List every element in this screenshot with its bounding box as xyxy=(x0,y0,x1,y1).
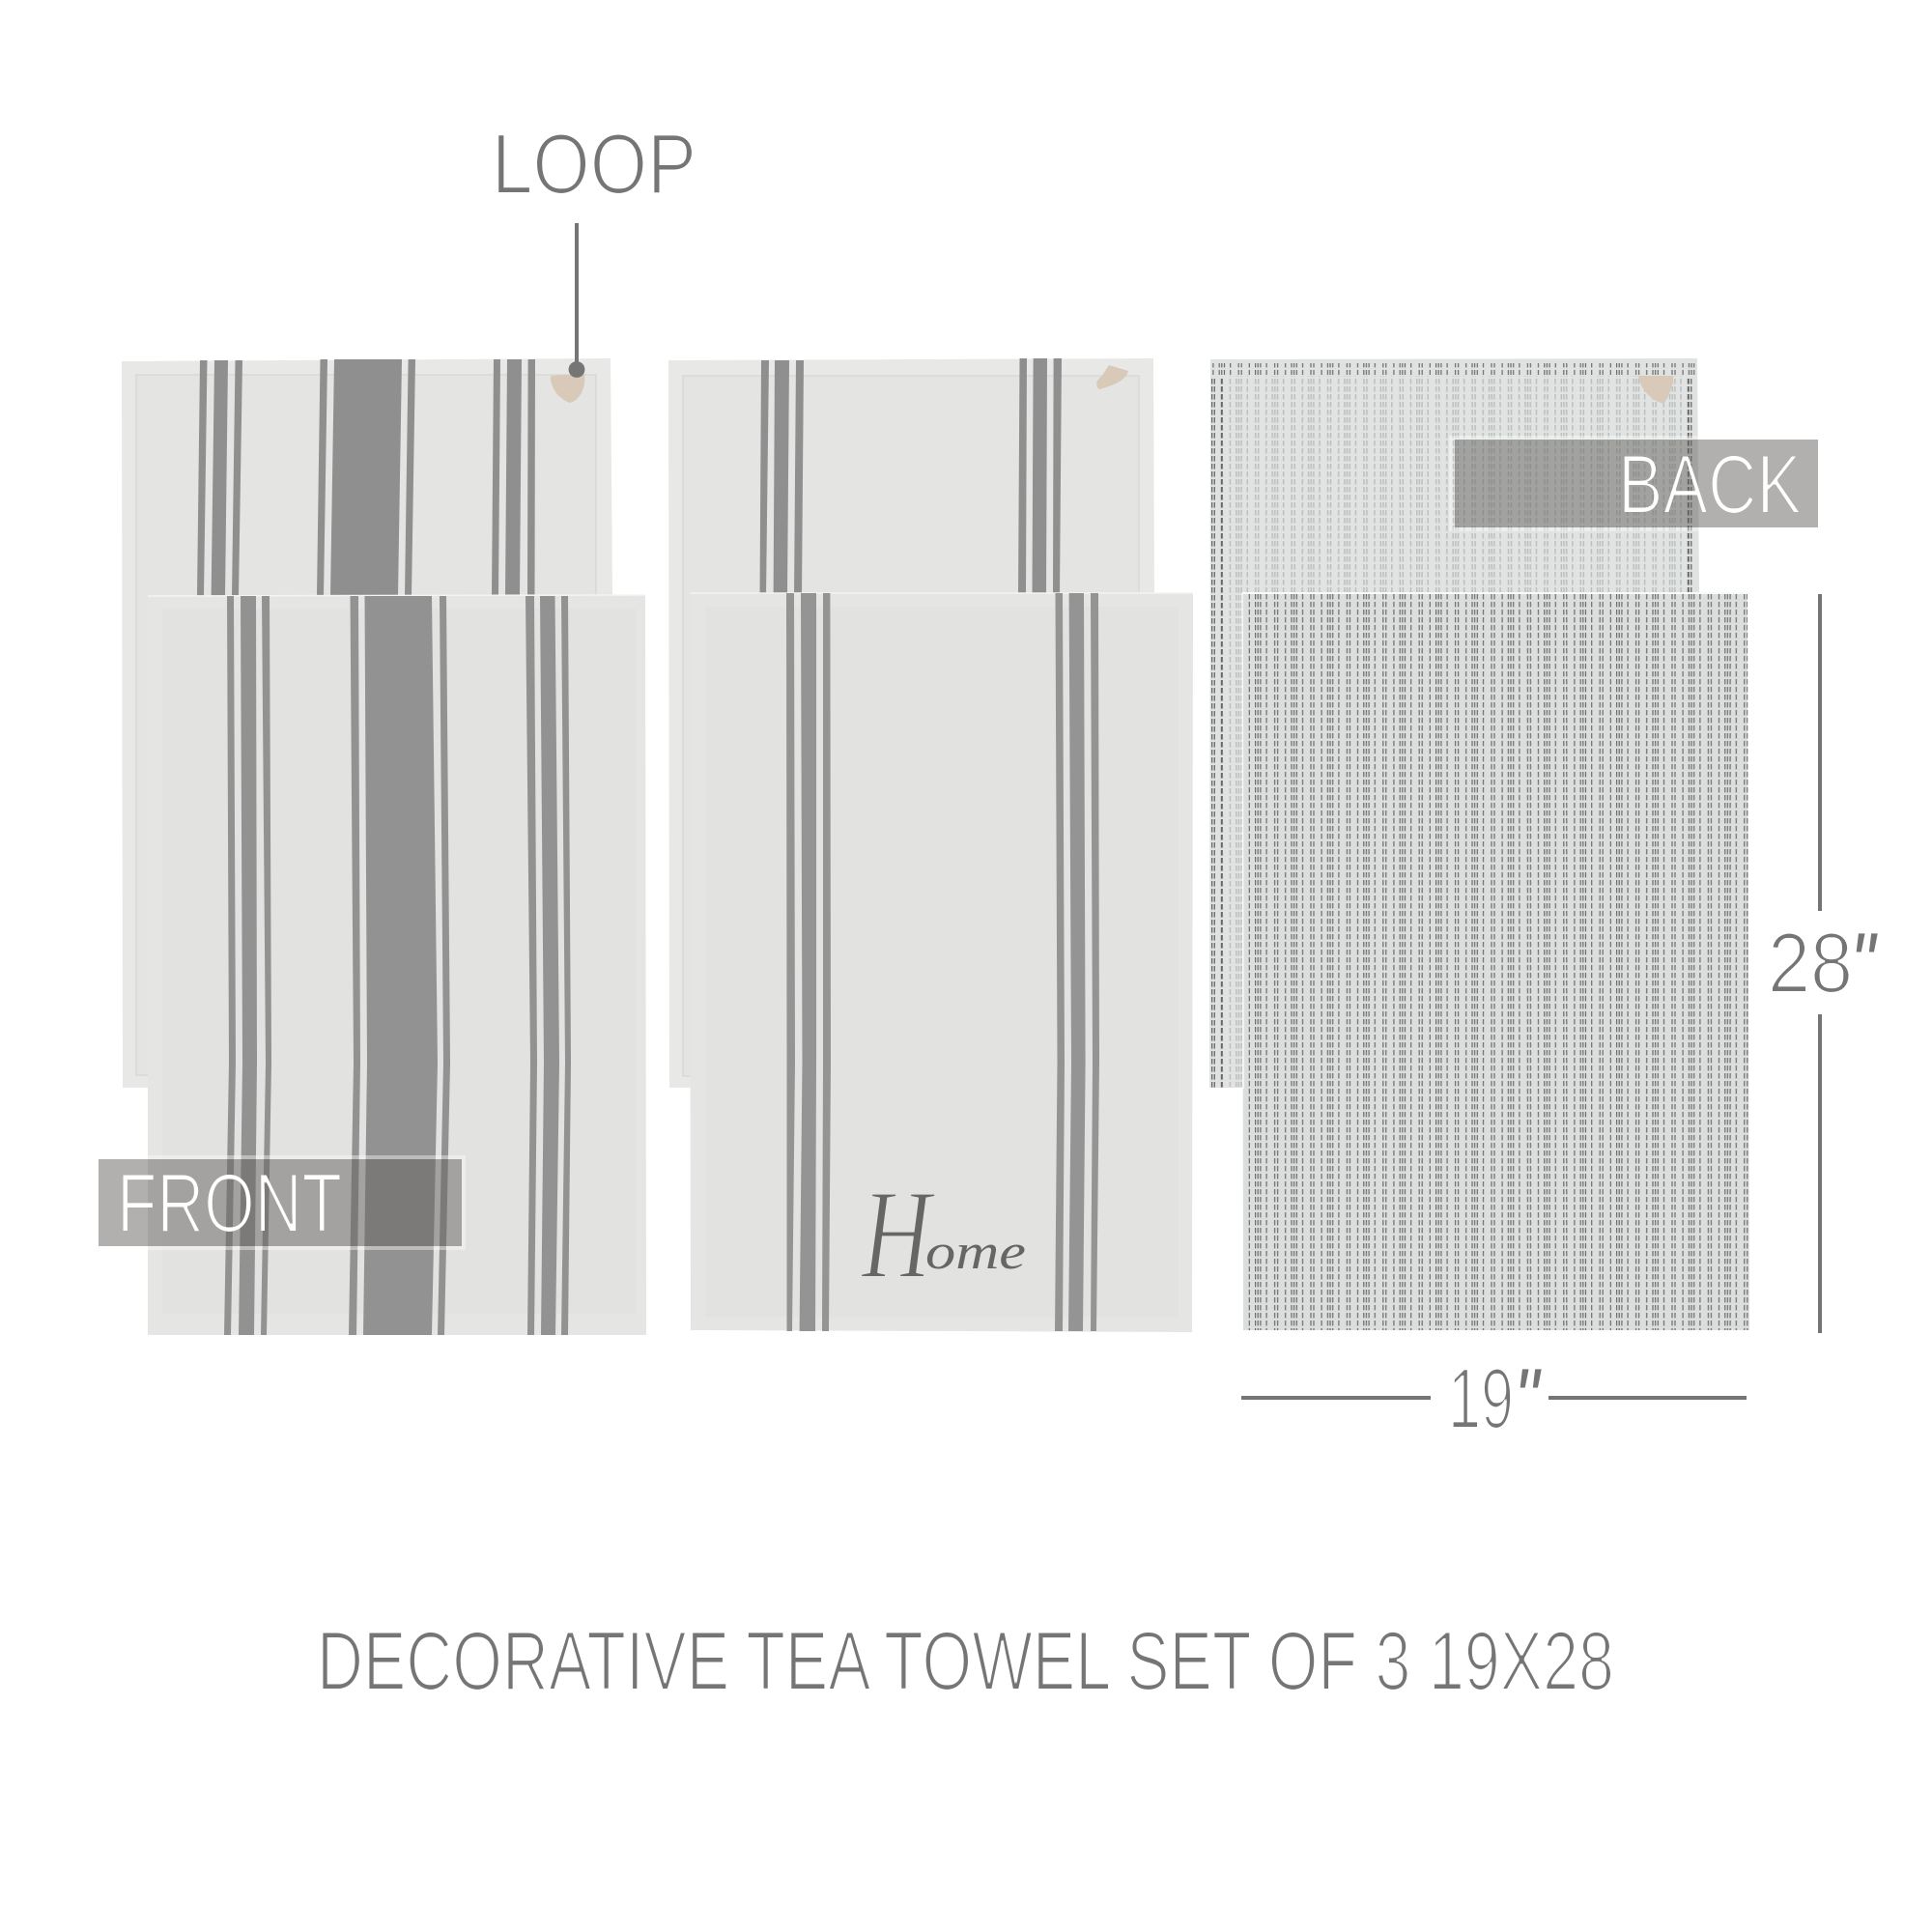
towel 1 back xyxy=(122,358,612,1088)
dimension: height 28 inches: 28 xyxy=(1768,915,1853,1010)
towel 1 loop xyxy=(551,374,584,403)
towel 2 front stripes xyxy=(786,593,1099,1331)
script word: Home xyxy=(860,1163,1026,1305)
dimension: width 19 inches xyxy=(1241,1350,1747,1446)
script word: Home: ome xyxy=(925,1225,1026,1280)
dimension: width 19 inches: 19 xyxy=(1448,1350,1514,1446)
script word: Home: H xyxy=(860,1163,936,1305)
towel 1 back stripes xyxy=(197,359,535,596)
towel 3 back xyxy=(1209,358,1699,1088)
towel 2 back stripes xyxy=(759,358,1062,596)
towel 2 loop xyxy=(1096,365,1128,389)
label: BACK xyxy=(1451,438,1820,531)
callout: LOOP xyxy=(492,116,696,378)
towel 2 back xyxy=(668,358,1154,1088)
label: BACK: BACK xyxy=(1618,439,1802,531)
towel 2 front xyxy=(690,593,1193,1332)
towel 1 front xyxy=(148,595,646,1335)
dimension: height 28 inches xyxy=(1768,594,1878,1333)
callout: LOOP: LOOP xyxy=(492,116,696,212)
towel 3 front xyxy=(1242,593,1749,1330)
dimension: width 19 inches: " xyxy=(1514,1350,1542,1446)
dimension: height 28 inches: " xyxy=(1850,915,1878,1010)
towel 1 front stripes xyxy=(224,596,571,1335)
loop pointer line xyxy=(569,223,584,378)
label: FRONT: FRONT xyxy=(117,1157,342,1250)
towel 3 loop xyxy=(1638,376,1673,404)
